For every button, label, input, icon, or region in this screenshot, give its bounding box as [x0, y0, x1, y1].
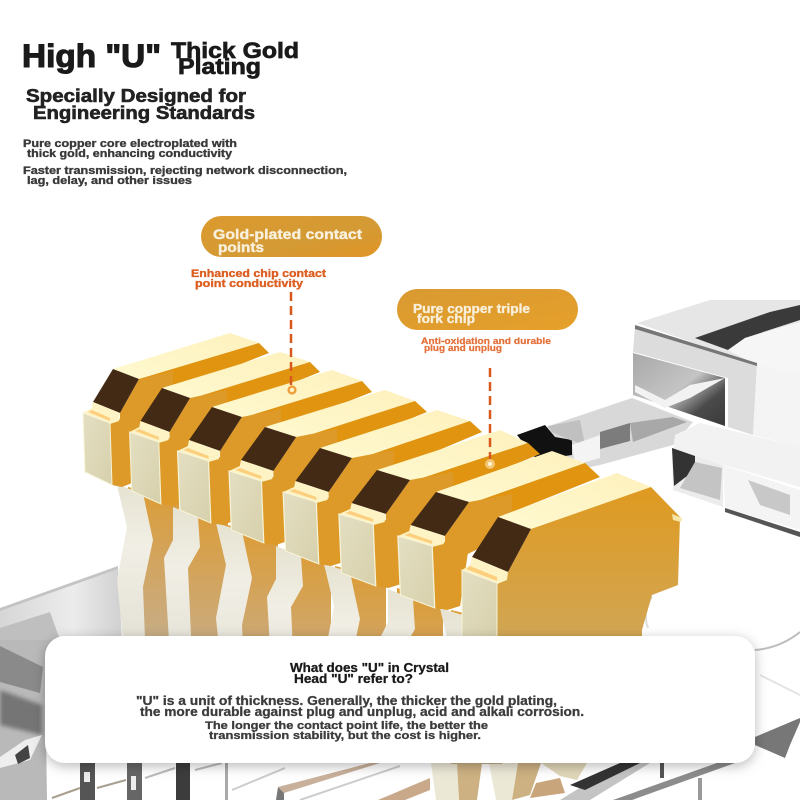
pin 6 — [339, 430, 540, 588]
card heading: Head "U" refer to? — [294, 672, 413, 686]
callout note: chip contact conductivity — [191, 268, 326, 290]
description text: Faster transmission, rejecting network disconnection, — [23, 165, 347, 177]
subtitle: Engineering Standards — [33, 103, 255, 123]
callout pill: gold-plated contact points: points — [218, 239, 264, 255]
description text: Pure copper core electroplated with — [23, 138, 237, 150]
description text: thick gold, enhancing conductivity — [27, 148, 233, 160]
description text — [23, 138, 347, 187]
card heading — [290, 661, 449, 686]
card heading: What does "U" in Crystal — [290, 661, 449, 675]
gold connector pin heads — [83, 333, 682, 640]
callout pill: pure copper triple fork chip: fork chip — [417, 311, 475, 326]
crystal housing: lower strip with chrome bars — [52, 763, 430, 800]
subtitle: Specially Designed for — [26, 86, 246, 106]
title: High "U" — [22, 38, 161, 74]
callout note: anti-oxidation — [421, 336, 551, 354]
pin 8: front full-face pin — [462, 473, 682, 640]
pin 3 — [178, 370, 372, 525]
subtitle — [26, 86, 255, 123]
callout pointer: pure copper triple fork chip — [485, 368, 495, 469]
chrome arm — [517, 398, 693, 470]
title — [22, 38, 299, 79]
callout note: chip contact conductivity: point conductivity — [195, 278, 304, 290]
crystal housing: lower left tray and chrome block — [0, 566, 122, 800]
callout pill: gold-plated contact points — [201, 216, 382, 257]
callout pill: gold-plated contact points: Gold-plated contact — [213, 226, 362, 242]
description text: lag, delay, and other issues — [27, 175, 192, 187]
pin 7 — [398, 451, 600, 610]
crystal housing: lower right chrome — [560, 597, 800, 800]
card body: unit of thickness — [136, 694, 584, 719]
card body: unit of thickness: "U" is a unit of thickness. Generally, the thicker the gold plating, — [136, 694, 557, 708]
pin 4 — [229, 390, 427, 545]
title: Plating — [178, 54, 261, 79]
crystal housing: upper right — [517, 300, 800, 537]
callout pill: pure copper triple fork chip — [397, 289, 578, 330]
pin 1 — [83, 333, 269, 487]
card body: contact point life: transmission stability, but the cost is higher. — [209, 730, 481, 742]
pin 2 — [130, 352, 320, 506]
callout note: chip contact conductivity: Enhanced chip contact — [191, 268, 326, 280]
connector pin legs — [117, 485, 502, 764]
callout pill: pure copper triple fork chip: Pure copper triple — [413, 301, 530, 316]
pin legs under the card — [431, 763, 587, 800]
title: Thick Gold — [171, 38, 299, 63]
pin 5 — [283, 410, 482, 566]
card body: contact point life: The longer the contact point life, the better the — [205, 720, 488, 732]
callout note: anti-oxidation: plug and unplug — [424, 343, 502, 354]
card body: contact point life — [205, 720, 488, 742]
card body: unit of thickness: the more durable against plug and unplug, acid and alkali corrosion. — [140, 705, 584, 719]
callout pointer: gold-plated contact points — [289, 292, 295, 393]
explanation card — [45, 636, 755, 763]
callout note: anti-oxidation: Anti-oxidation and durable — [421, 336, 551, 347]
